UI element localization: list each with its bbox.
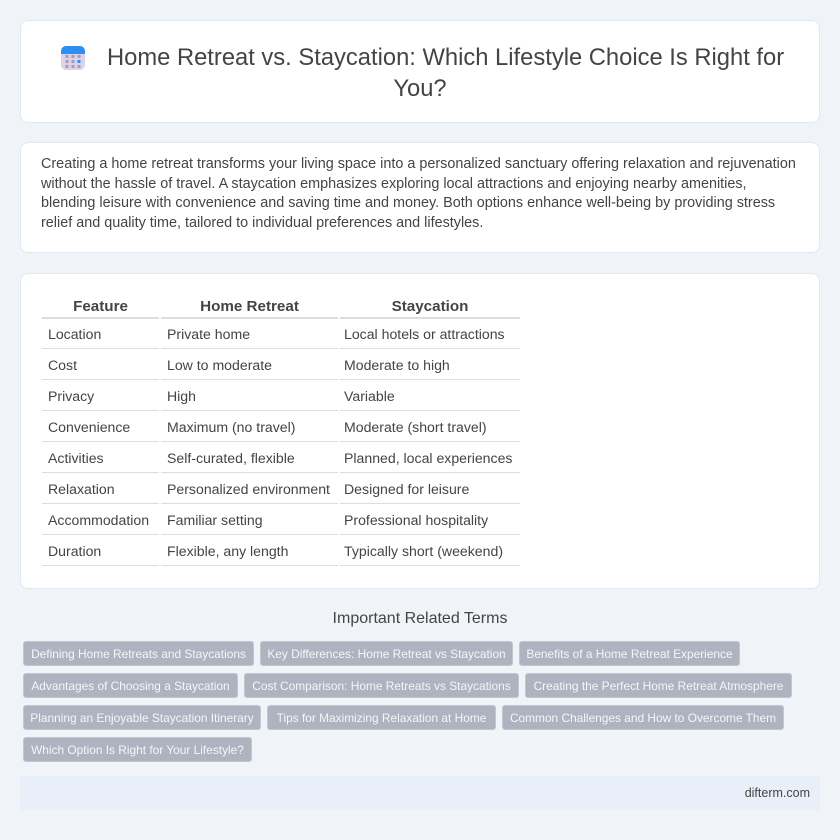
comparison table: Cost xyxy=(48,357,77,373)
comparison table: Familiar setting xyxy=(167,512,263,528)
related term tags: Advantages of Choosing a Staycation xyxy=(31,679,230,693)
related term tags: Common Challenges and How to Overcome Them xyxy=(510,711,776,725)
intro paragraph: without the hassle of travel. A staycation emphasizes exploring local attractions and enjoying nearby amenities, xyxy=(41,176,747,192)
footer bar xyxy=(20,776,820,810)
intro paragraph xyxy=(41,156,796,230)
comparison table: Planned, local experiences xyxy=(344,450,512,466)
intro paragraph: relief and quality time, tailored to individual preferences and lifestyles. xyxy=(41,214,483,230)
icon: calendar xyxy=(61,46,85,70)
comparison table: Convenience xyxy=(48,419,130,435)
comparison table: Staycation xyxy=(392,298,468,315)
comparison table: Private home xyxy=(167,326,250,342)
intro paragraph: blending leisure with convenience and saving time and money. Both options enhance well-being by providing stress xyxy=(41,195,775,211)
comparison table: Privacy xyxy=(48,388,94,404)
related term tags: Creating the Perfect Home Retreat Atmosphere xyxy=(534,679,783,693)
comparison table: Personalized environment xyxy=(167,481,330,497)
title: You? xyxy=(393,75,447,102)
comparison table: Designed for leisure xyxy=(344,481,469,497)
comparison table: Activities xyxy=(48,450,104,466)
panel: comparison table xyxy=(20,273,820,589)
comparison table: Professional hospitality xyxy=(344,512,488,528)
comparison table: Typically short (weekend) xyxy=(344,543,503,559)
heading: related terms: Important Related Terms xyxy=(333,610,507,627)
comparison table: Low to moderate xyxy=(167,357,272,373)
comparison table: Feature xyxy=(73,298,128,315)
comparison table: Moderate (short travel) xyxy=(344,419,487,435)
comparison table: Home Retreat xyxy=(200,298,299,315)
footer brand: difterm.com xyxy=(745,786,810,800)
related term tags: Planning an Enjoyable Staycation Itinerary xyxy=(30,711,254,725)
related term tags: Defining Home Retreats and Staycations xyxy=(31,647,246,661)
panel: title header xyxy=(20,20,820,123)
related term tags: Cost Comparison: Home Retreats vs Staycations xyxy=(252,679,511,693)
comparison table: Local hotels or attractions xyxy=(344,326,505,342)
comparison table xyxy=(42,298,520,566)
comparison table: Relaxation xyxy=(48,481,115,497)
related term tags: Key Differences: Home Retreat vs Staycation xyxy=(267,647,506,661)
panel: intro text xyxy=(20,142,820,253)
comparison table: Accommodation xyxy=(48,512,149,528)
comparison table: Self-curated, flexible xyxy=(167,450,295,466)
comparison table: Flexible, any length xyxy=(167,543,288,559)
related term tags: Which Option Is Right for Your Lifestyle? xyxy=(31,743,244,757)
comparison table: Moderate to high xyxy=(344,357,450,373)
comparison table: Duration xyxy=(48,543,101,559)
comparison table: Location xyxy=(48,326,101,342)
intro paragraph: Creating a home retreat transforms your living space into a personalized sanctuary offering relaxation and rejuvenation xyxy=(41,156,796,172)
title: Home Retreat vs. Staycation: Which Lifestyle Choice Is Right for xyxy=(107,44,784,71)
related term tags: Tips for Maximizing Relaxation at Home xyxy=(277,711,486,725)
comparison table: High xyxy=(167,388,196,404)
title xyxy=(107,44,784,102)
related term tags: Benefits of a Home Retreat Experience xyxy=(526,647,733,661)
comparison table: Maximum (no travel) xyxy=(167,419,295,435)
related term tags xyxy=(23,641,792,762)
comparison table: Variable xyxy=(344,388,395,404)
